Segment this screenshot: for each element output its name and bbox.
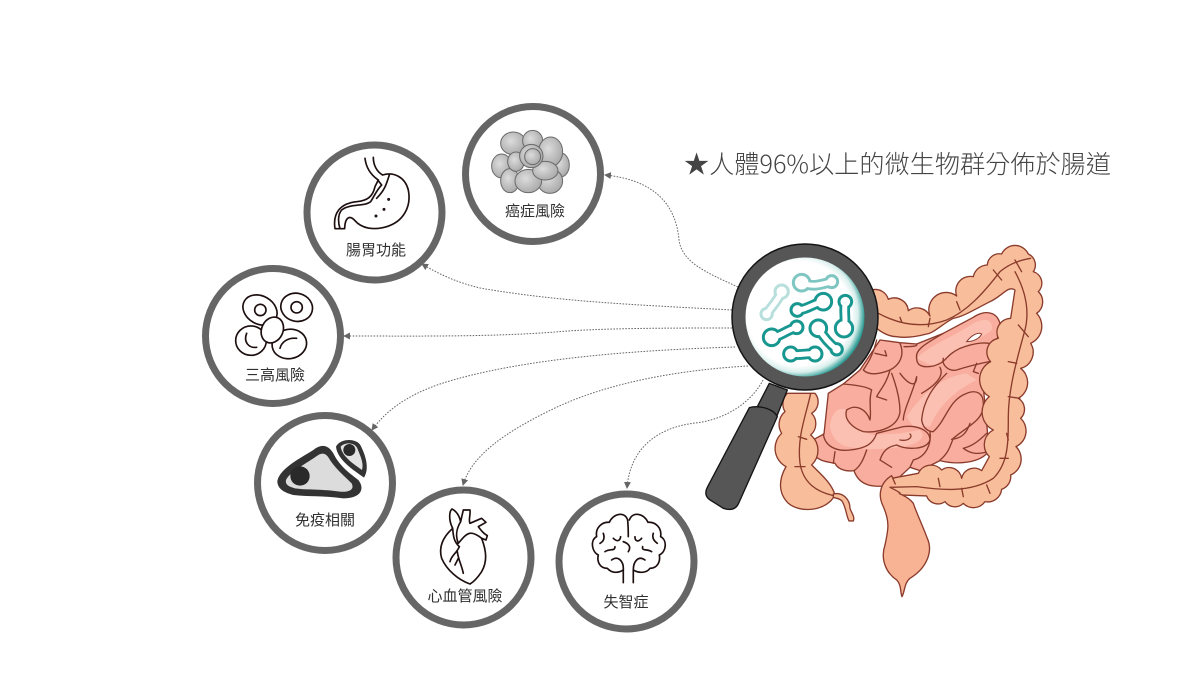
panel: dementia — [559, 494, 694, 629]
microbe — [791, 293, 832, 316]
microbes — [761, 274, 853, 361]
title: ★人體96%以上的微生物群分佈於腸道 — [684, 145, 1111, 181]
microbe — [835, 295, 853, 337]
icon: immune cells — [277, 440, 367, 498]
icon: tumor cell cluster — [492, 130, 569, 193]
lens — [746, 258, 864, 376]
label: 三高風險 — [245, 367, 305, 384]
label: 腸胃功能 — [346, 242, 406, 259]
panel: cardiovascular risk — [396, 490, 531, 625]
arrow to cancer risk — [605, 175, 738, 287]
faded microbe — [793, 274, 838, 291]
label: 心血管風險 — [427, 587, 503, 605]
arrow to immunity — [372, 347, 735, 430]
large intestine — [775, 245, 1043, 597]
microbe — [784, 347, 822, 361]
magnifying glass — [706, 244, 878, 509]
label: 失智症 — [603, 593, 649, 611]
microbe — [763, 321, 803, 346]
microbe — [810, 320, 842, 355]
panel: metabolic risk — [206, 268, 340, 404]
arrow to metabolic risk — [344, 328, 732, 336]
icon: stomach — [335, 157, 409, 229]
small intestine — [813, 313, 1001, 486]
arrow to dementia — [627, 380, 763, 488]
faded microbe — [761, 285, 788, 320]
panel: immunity — [258, 416, 392, 550]
lens rim — [732, 244, 878, 390]
icon: blood cells — [236, 289, 316, 361]
intestines illustration — [775, 245, 1043, 597]
panel: gut function — [307, 145, 442, 280]
icon: brain — [592, 514, 665, 583]
arrow to gut function — [422, 264, 732, 310]
arrow to cardiovascular risk — [463, 366, 748, 485]
label: 癌症風險 — [505, 203, 565, 220]
label: 免疫相關 — [295, 512, 355, 529]
dotted arrows — [344, 175, 763, 488]
handle — [706, 383, 787, 509]
icon: heart — [441, 509, 487, 584]
panel: cancer risk — [466, 106, 600, 242]
